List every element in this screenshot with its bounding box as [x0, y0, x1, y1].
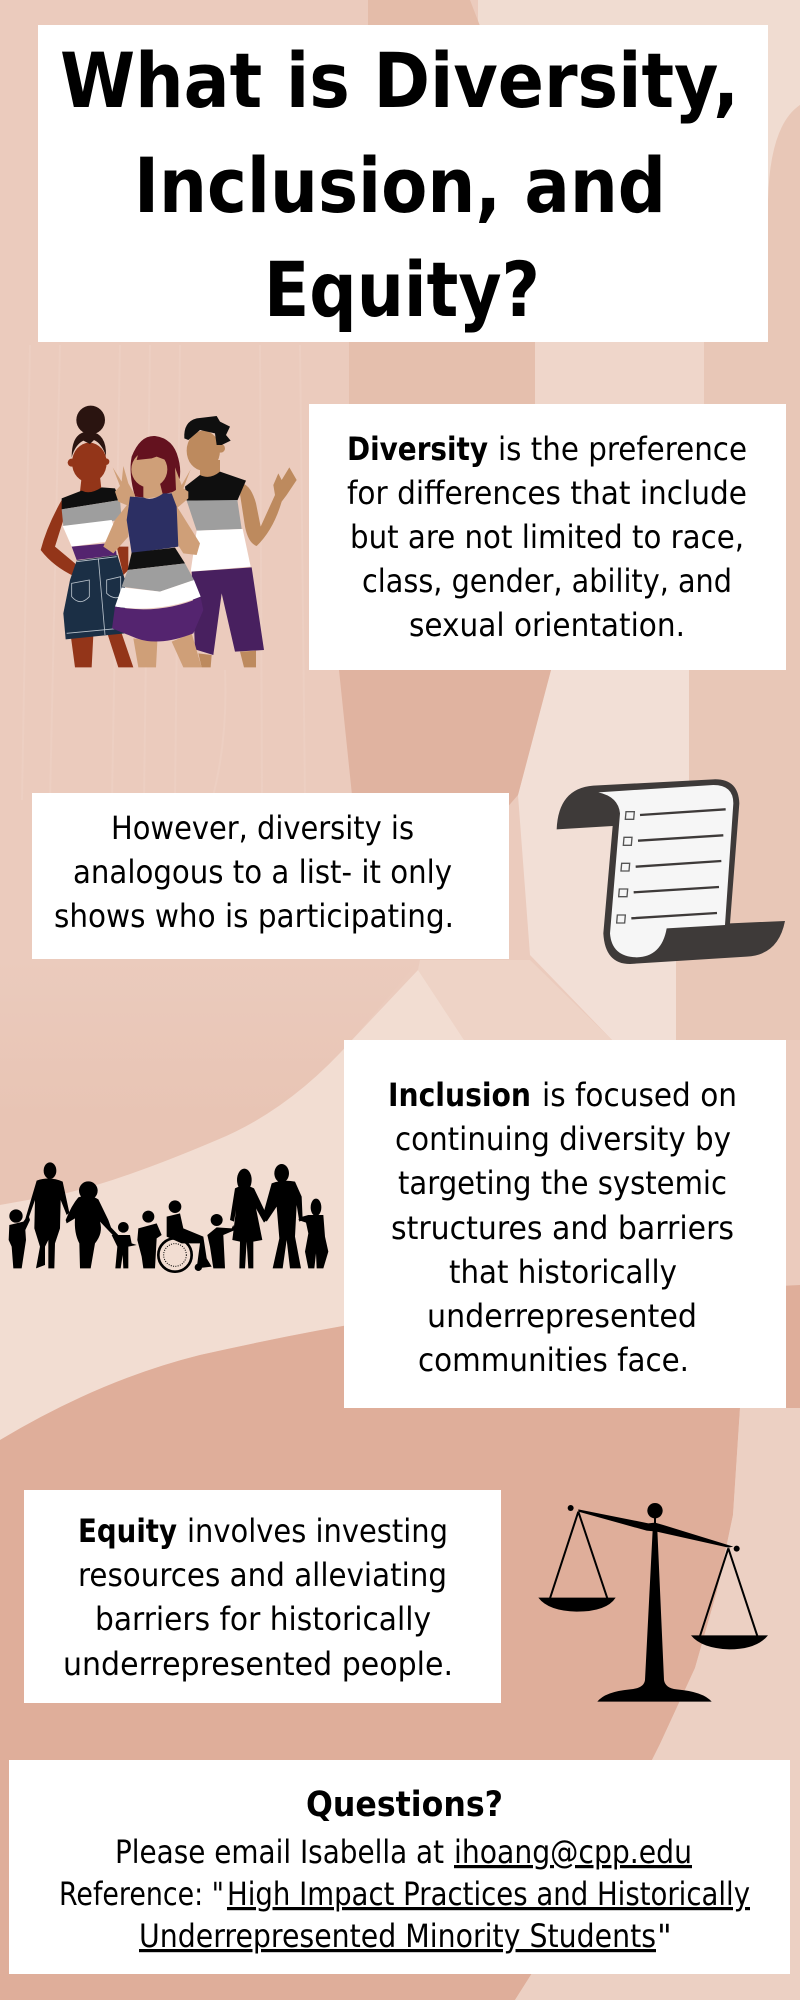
panel: inclusion definition: underrepresented: [427, 1297, 697, 1335]
title text: Inclusion, and: [134, 141, 666, 230]
title text: What is Diversity,: [60, 36, 739, 125]
panel: diversity definition: Diversity: [347, 430, 488, 468]
panel: inclusion definition: targeting the systemic: [398, 1164, 727, 1202]
title text: Equity?: [264, 245, 540, 334]
panel: inclusion definition: that historically: [449, 1253, 677, 1291]
panel: diversity definition: sexual orientation.: [409, 606, 685, 644]
panel: questions and reference: [9, 1760, 790, 1974]
icon: tilted balance scale: [538, 1503, 768, 1702]
panel: equity definition: Equity: [78, 1512, 177, 1550]
panel: diversity definition: is the preference: [498, 430, 747, 468]
panel: diversity is like a list: However, diversity is: [111, 809, 414, 847]
panel: equity definition: [24, 1490, 501, 1703]
panel: diversity is like a list: shows who is participating.: [54, 897, 454, 935]
panel: inclusion definition: Inclusion: [388, 1076, 531, 1114]
panel: inclusion definition: is focused on: [542, 1076, 737, 1114]
panel: diversity is like a list: [32, 793, 509, 959]
title panel: [38, 25, 768, 342]
panel: questions and reference: Underrepresented Minority Students: [139, 1917, 656, 1955]
panel: inclusion definition: [344, 1040, 786, 1408]
panel: questions and reference: Please email Isabella at: [115, 1833, 444, 1871]
panel: equity definition: involves investing: [187, 1512, 448, 1550]
icon: silhouettes of a diverse family group: [9, 1162, 328, 1272]
panel: questions and reference: ihoang@cpp.edu: [454, 1833, 692, 1871]
panel: diversity definition: for differences that include: [347, 474, 747, 512]
panel: questions and reference: ": [657, 1917, 672, 1955]
panel: diversity definition: class, gender, ability, and: [362, 562, 732, 600]
panel: equity definition: resources and alleviating: [78, 1556, 447, 1594]
heading: questions: Questions?: [306, 1785, 503, 1825]
panel: diversity definition: but are not limited to race,: [350, 518, 744, 556]
title text: [60, 36, 739, 334]
illustration: three people wearing asexual-pride colours: [41, 406, 297, 667]
panel: diversity is like a list: analogous to a list- it only: [73, 853, 452, 891]
panel: equity definition: underrepresented people.: [63, 1645, 453, 1683]
panel: diversity definition: [309, 404, 786, 670]
panel: inclusion definition: communities face.: [418, 1341, 689, 1379]
panel: questions and reference: Reference: ": [59, 1875, 224, 1913]
panel: inclusion definition: structures and barriers: [391, 1209, 734, 1247]
panel: equity definition: barriers for historically: [95, 1600, 431, 1638]
icon: checklist scroll: [557, 779, 785, 964]
panel: inclusion definition: continuing diversity by: [395, 1120, 731, 1158]
